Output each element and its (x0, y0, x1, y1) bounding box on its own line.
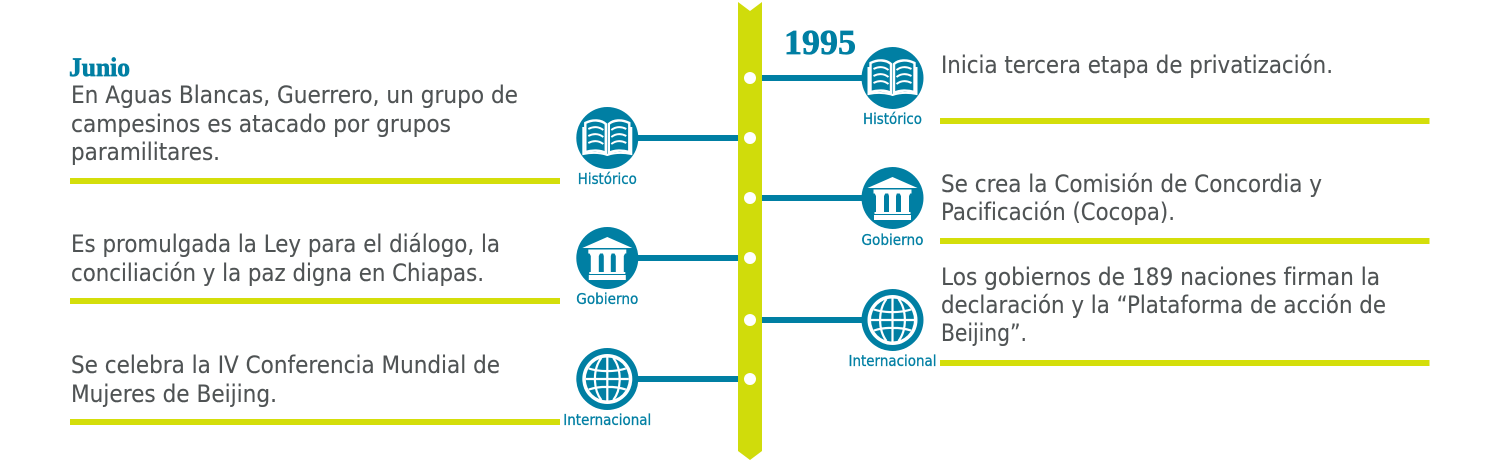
text block: campesinos es atacado por grupos (71, 110, 451, 138)
text block: Inicia tercera etapa de privatización. (941, 51, 1333, 79)
connector line (636, 255, 738, 261)
rule (940, 118, 1430, 124)
timeline bar (738, 2, 762, 460)
rule (70, 178, 560, 184)
entry: Conferencia de Beijing (70, 348, 738, 429)
text block: paramilitares. (71, 138, 220, 166)
text block: Mujeres de Beijing. (71, 380, 277, 408)
category label: Histórico (578, 170, 637, 188)
month heading: Junio (69, 53, 130, 82)
entry: Inicia tercera etapa (762, 47, 1430, 128)
icon: globe (576, 348, 638, 410)
year heading: 1995 (784, 23, 856, 62)
rule (940, 360, 1430, 366)
icon: government building (862, 167, 924, 229)
entry: Junio Aguas Blancas (69, 53, 738, 188)
connector line (762, 75, 864, 81)
text block: Pacificación (Cocopa). (941, 198, 1175, 226)
icon: book (862, 47, 924, 109)
rule (70, 298, 560, 304)
rule (70, 419, 560, 425)
category label: Histórico (863, 110, 922, 128)
icon: globe (862, 289, 924, 351)
entry: Plataforma de acción de Beijing (762, 263, 1430, 370)
text block: Los gobiernos de 189 naciones firman la (941, 263, 1380, 291)
category label: Gobierno (862, 231, 924, 249)
text block: Se crea la Comisión de Concordia y (941, 170, 1322, 198)
text block: En Aguas Blancas, Guerrero, un grupo de (71, 81, 518, 109)
icon: government building (576, 227, 638, 289)
text block: conciliación y la paz digna en Chiapas. (71, 259, 484, 287)
entry: Comisión de Concordia (762, 167, 1430, 249)
rule (940, 238, 1430, 244)
category label: Gobierno (576, 290, 638, 308)
connector line (636, 135, 738, 141)
connector line (762, 317, 864, 323)
text block: Es promulgada la Ley para el diálogo, la (71, 230, 500, 258)
category label: Internacional (563, 411, 651, 429)
connector line (636, 376, 738, 382)
entry: Ley para el diálogo (70, 227, 738, 308)
text block: Beijing”. (941, 319, 1027, 347)
connector line (762, 195, 864, 201)
text block: Se celebra la IV Conferencia Mundial de (71, 351, 500, 379)
text block: declaración y la “Plataforma de acción de (941, 291, 1386, 319)
icon: book (576, 107, 638, 169)
category label: Internacional (848, 352, 936, 370)
